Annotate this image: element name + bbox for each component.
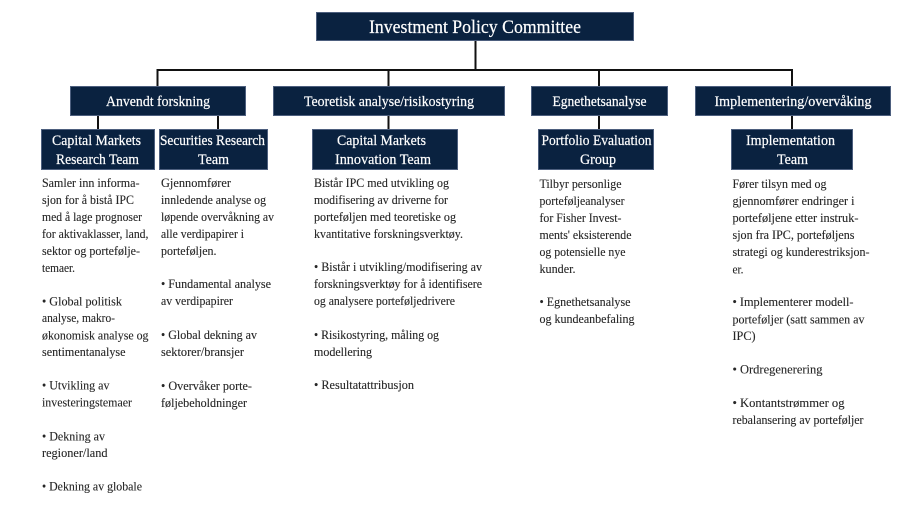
text block: Capital Markets Research Team: for aktivaklasser, land, <box>42 226 148 241</box>
text block: Capital Markets Research Team: • Dekning av globale <box>42 478 142 494</box>
text block: Securities Research Team: innledende analyse og <box>161 192 266 207</box>
text block: Implementation Team: IPC) <box>732 328 756 343</box>
text block: Securities Research Team: • Global dekning av <box>161 327 257 342</box>
text block: Capital Markets Innovation Team: porteføljen med teoretiske og <box>314 209 456 224</box>
title box <box>316 12 634 40</box>
text block: Capital Markets Innovation Team: Bistår IPC med utvikling og <box>314 175 449 190</box>
heading: Implementering/overvåking: Implementering/overvåking <box>714 94 872 110</box>
text block: Implementation Team: • Implementerer modell- <box>732 294 854 309</box>
text block: Securities Research Team: Gjennomfører <box>161 175 232 190</box>
text block: Capital Markets Research Team: • Global politisk <box>42 294 122 308</box>
text block: Securities Research Team: porteføljen. <box>161 243 216 258</box>
text block: Capital Markets Innovation Team: • Resultatattribusjon <box>314 377 414 392</box>
text block: Implementation Team: strategi og kunderestriksjon- <box>732 244 870 259</box>
text block: Implementation Team: rebalansering av porteføljer <box>732 412 864 427</box>
text block: Securities Research Team: føljebeholdninger <box>161 395 248 410</box>
text block: Capital Markets Research Team: regioner/land <box>42 445 108 460</box>
text block: Capital Markets Innovation Team: • Risikostyring, måling og <box>314 327 439 342</box>
text block: Capital Markets Research Team <box>42 175 149 494</box>
text block: Capital Markets Research Team: økonomisk analyse og <box>42 328 149 342</box>
text block: Capital Markets Innovation Team: kvantitative forskningsverktøy. <box>314 226 463 241</box>
text block: Capital Markets Research Team: • Dekning av <box>42 428 105 444</box>
team box: Securities Research Team: Team <box>198 152 230 168</box>
heading: Implementering/overvåking <box>696 86 890 116</box>
text block: Securities Research Team: • Overvåker porte- <box>161 378 252 393</box>
title box: Investment Policy Committee <box>369 18 581 38</box>
text block: Capital Markets Research Team: investeringstemaer <box>42 394 133 410</box>
text block: Capital Markets Research Team: sjon for å bistå IPC <box>42 192 134 207</box>
team box: Implementation Team: Team <box>777 152 809 168</box>
team box: Capital Markets Innovation Team: Innovation Team <box>335 152 432 168</box>
text block: Implementation Team: porteføljer (satt sammen av <box>732 312 865 326</box>
text block: Securities Research Team <box>161 175 274 410</box>
text block: Implementation Team: porteføljene etter instruk- <box>732 210 858 225</box>
text block: Implementation Team: sjon fra IPC, porteføljens <box>732 227 854 242</box>
team box: Securities Research Team <box>160 130 268 170</box>
text block: Capital Markets Research Team: • Utvikling av <box>42 378 110 392</box>
text block: Capital Markets Innovation Team: forskningsverktøy for å identifisere <box>314 276 482 291</box>
team box: Securities Research Team: Securities Research <box>160 133 266 149</box>
text block: Capital Markets Research Team: sektor og portefølje- <box>42 243 140 258</box>
heading: Anvendt forskning <box>70 86 246 116</box>
text block: Implementation Team: • Ordregenerering <box>732 362 823 376</box>
text block: Implementation Team: Fører tilsyn med og <box>732 176 827 191</box>
text block: Implementation Team <box>732 176 870 427</box>
text block: Securities Research Team: løpende overvåkning av <box>161 209 274 224</box>
text block: Capital Markets Research Team: analyse, makro- <box>42 310 115 325</box>
team box: Capital Markets Innovation Team: Capital Markets <box>337 133 426 149</box>
text block: Capital Markets Research Team: temaer. <box>42 260 75 275</box>
text block: Portfolio Evaluation Group <box>540 176 635 326</box>
team box: Capital Markets Innovation Team <box>312 130 458 170</box>
text block: Portfolio Evaluation Group: Tilbyr personlige <box>540 176 622 191</box>
team box: Capital Markets Research Team <box>42 130 154 170</box>
team box: Portfolio Evaluation Group: Portfolio Evaluation <box>542 133 652 149</box>
team box: Implementation Team <box>732 130 852 170</box>
team box: Capital Markets Research Team: Capital Markets <box>52 133 141 149</box>
team box: Portfolio Evaluation Group <box>538 130 654 170</box>
connector lines <box>98 41 793 129</box>
text block: Implementation Team: er. <box>732 262 744 276</box>
text block: Portfolio Evaluation Group: og potensielle nye <box>540 244 626 259</box>
heading: Egnethetsanalyse: Egnethetsanalyse <box>552 94 646 110</box>
heading: Teoretisk analyse/risikostyring: Teoretisk analyse/risikostyring <box>304 94 474 110</box>
text block: Securities Research Team: • Fundamental analyse <box>161 276 271 291</box>
heading: Egnethetsanalyse <box>532 86 668 116</box>
text block: Portfolio Evaluation Group: • Egnethetsanalyse <box>540 294 631 309</box>
text block: Capital Markets Innovation Team: modellering <box>314 344 372 359</box>
text block: Capital Markets Innovation Team: modifisering av driverne for <box>314 192 449 207</box>
text block: Capital Markets Innovation Team: og analysere porteføljedrivere <box>314 293 455 308</box>
text block: Securities Research Team: alle verdipapirer i <box>161 226 244 241</box>
text block: Implementation Team: gjennomfører endringer i <box>732 193 855 208</box>
text block: Portfolio Evaluation Group: porteføljeanalyser <box>540 193 625 208</box>
text block: Capital Markets Innovation Team <box>314 175 482 392</box>
text block: Capital Markets Research Team: sentimentanalyse <box>42 344 126 359</box>
text block: Securities Research Team: av verdipapirer <box>161 293 234 308</box>
text block: Securities Research Team: sektorer/bransjer <box>161 344 245 359</box>
text block: Portfolio Evaluation Group: kunder. <box>540 261 576 276</box>
text block: Portfolio Evaluation Group: for Fisher Invest- <box>540 210 622 225</box>
text block: Capital Markets Research Team: med å lage prognoser <box>42 209 143 224</box>
team box: Portfolio Evaluation Group: Group <box>580 152 616 168</box>
text block: Capital Markets Innovation Team: • Bistår i utvikling/modifisering av <box>314 259 482 274</box>
team box: Capital Markets Research Team: Research Team <box>56 152 140 168</box>
text block: Portfolio Evaluation Group: og kundeanbefaling <box>540 311 635 326</box>
text block: Capital Markets Research Team: Samler inn informa- <box>42 175 140 190</box>
text block: Implementation Team: • Kontantstrømmer og <box>732 395 845 410</box>
heading: Teoretisk analyse/risikostyring <box>274 86 504 116</box>
text block: Portfolio Evaluation Group: ments' eksisterende <box>540 227 632 242</box>
team box: Implementation Team: Implementation <box>746 133 836 149</box>
heading: Anvendt forskning: Anvendt forskning <box>106 94 210 110</box>
